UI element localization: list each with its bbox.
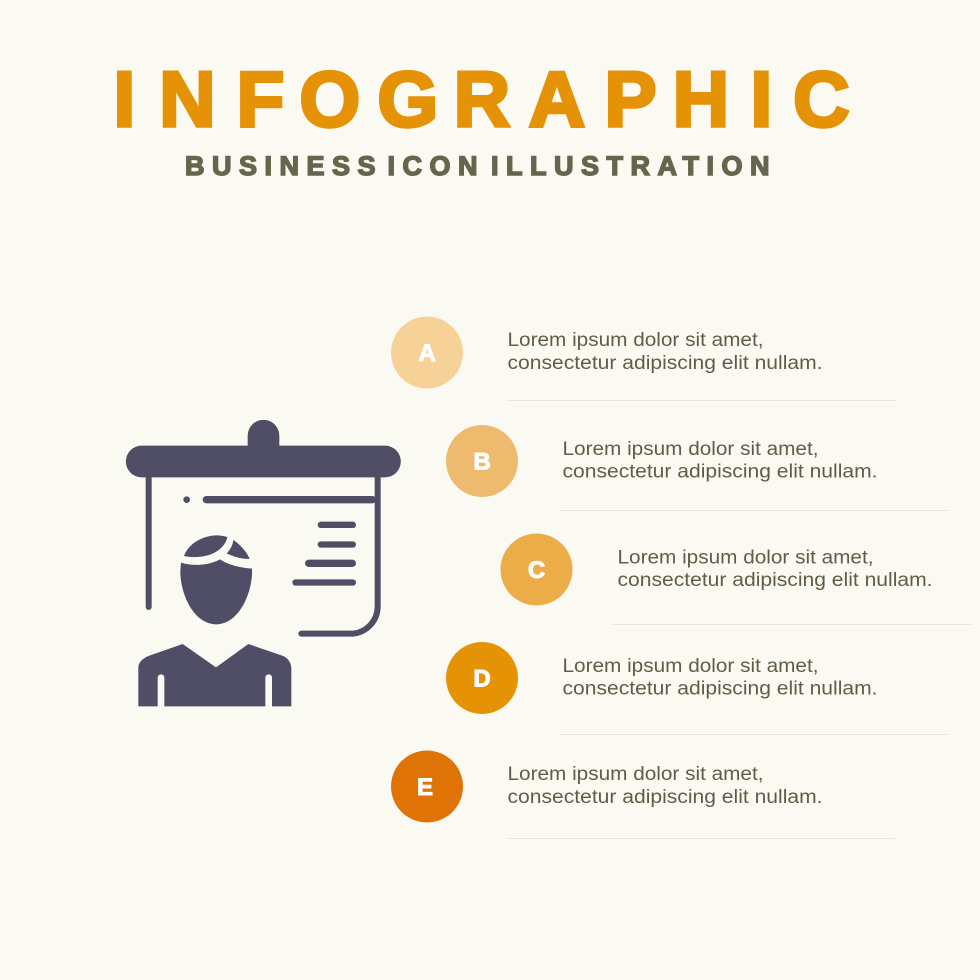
text E: Lorem ipsum dolor sit amet, (508, 764, 764, 785)
screen outline (149, 477, 378, 634)
text C: consectetur adipiscing elit nullam. (618, 570, 932, 591)
text C: Lorem ipsum dolor sit amet, (618, 548, 874, 568)
presenter head (180, 535, 252, 624)
item D (446, 642, 878, 714)
badge B: B (473, 448, 491, 476)
item E (391, 750, 822, 822)
badge A: A (418, 340, 436, 367)
badge C: C (528, 557, 545, 584)
subtitle: ICON (388, 151, 485, 181)
badge E: E (417, 774, 433, 801)
subtitle (185, 151, 777, 181)
icon: presenter at projection screen (126, 420, 401, 706)
subtitle: BUSINESS (185, 151, 383, 181)
text A (508, 330, 822, 374)
text B: consectetur adipiscing elit nullam. (562, 462, 878, 482)
subtitle: ILLUSTRATION (491, 151, 777, 181)
text B (562, 439, 878, 482)
text C (618, 548, 932, 591)
badge D: D (473, 666, 491, 692)
text B: Lorem ipsum dolor sit amet, (562, 439, 818, 460)
badge A (391, 316, 463, 388)
text E: consectetur adipiscing elit nullam. (508, 787, 822, 808)
badge D (446, 642, 518, 714)
screen top line and dot (183, 496, 376, 503)
badge B (446, 425, 518, 497)
item B (446, 425, 878, 497)
screen text lines (292, 522, 356, 586)
text A: Lorem ipsum dolor sit amet, (508, 330, 764, 351)
title: INFOGRAPHIC (114, 55, 850, 143)
text D: consectetur adipiscing elit nullam. (562, 678, 878, 700)
item C (500, 534, 932, 606)
badge C (500, 534, 572, 606)
presenter body (138, 644, 291, 706)
text E (508, 764, 822, 808)
screen roller bar and knob (126, 420, 401, 477)
text D: Lorem ipsum dolor sit amet, (562, 656, 818, 677)
badge E (391, 750, 463, 822)
item A (391, 316, 822, 388)
text A: consectetur adipiscing elit nullam. (508, 353, 822, 374)
text D (562, 656, 878, 700)
